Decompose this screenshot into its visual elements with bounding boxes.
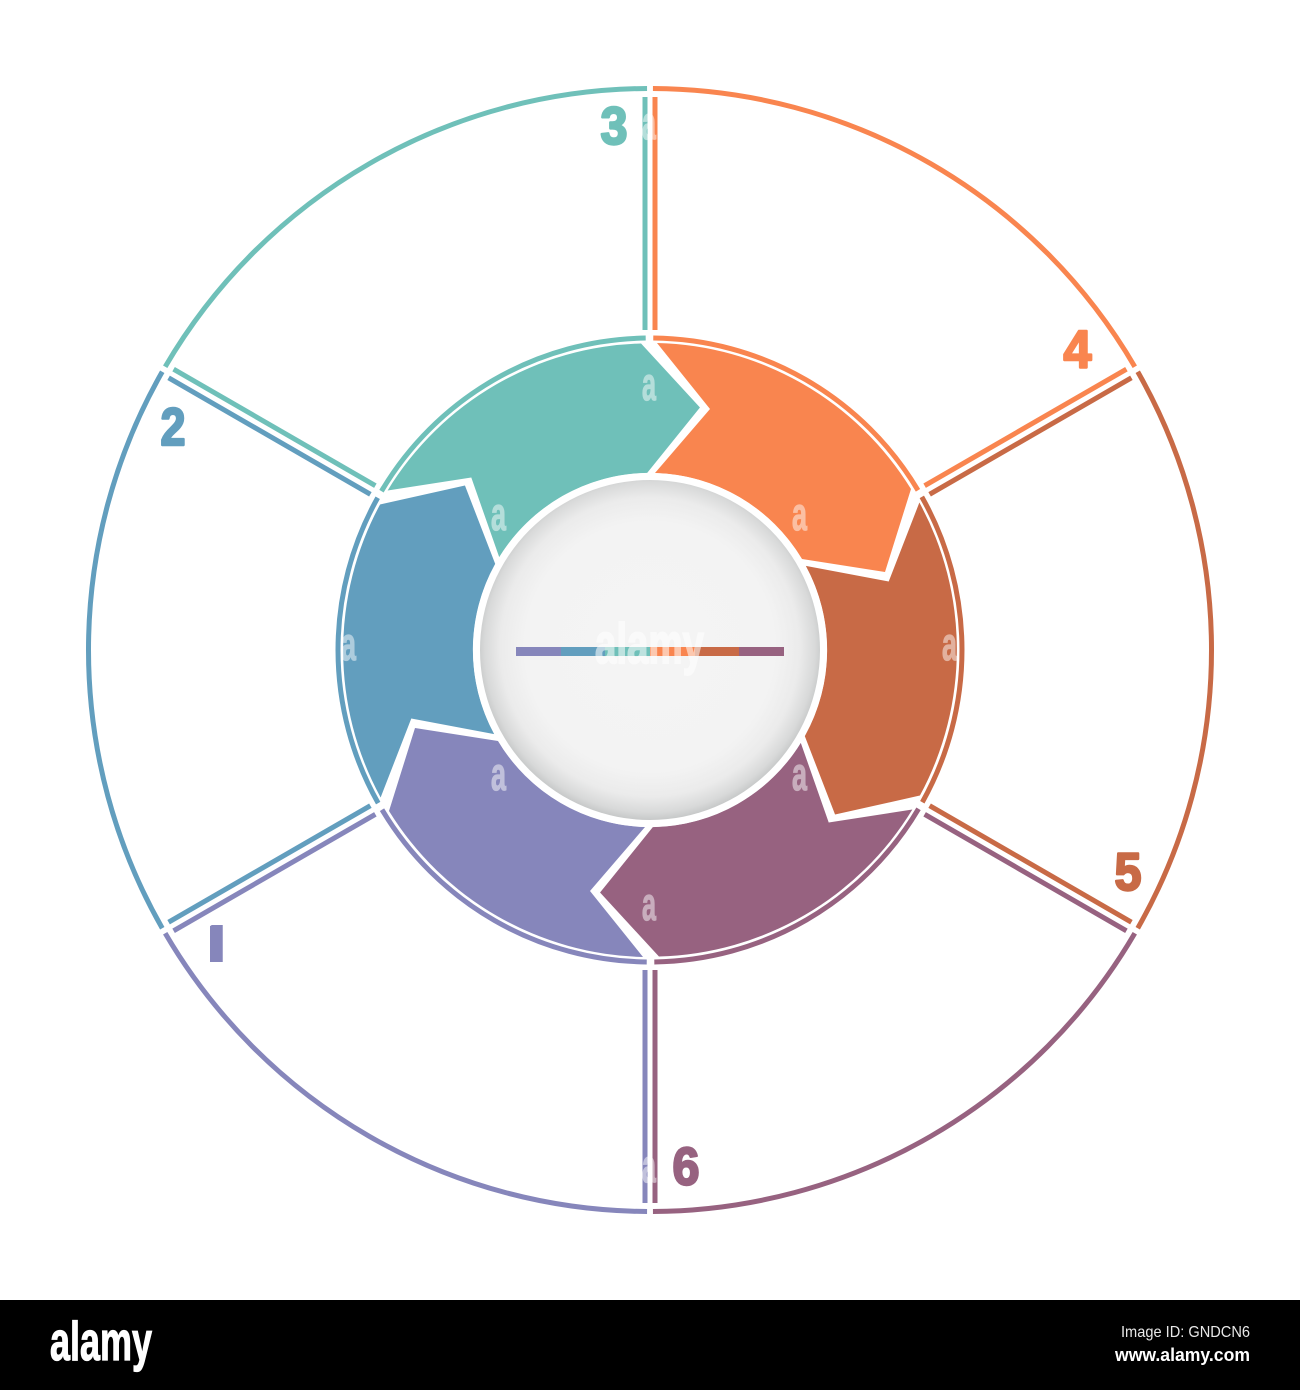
number 3: 3 [600, 97, 628, 156]
segment 4: orange [653, 89, 1135, 572]
number 6: 6 [672, 1138, 700, 1196]
watermark letters [341, 97, 957, 1192]
number 4: 4 [1064, 320, 1092, 380]
watermark letters: a [792, 748, 807, 800]
segment 3: teal [165, 0, 825, 608]
watermark letters: a [942, 618, 957, 670]
website: www.alamy.com [1114, 1345, 1250, 1365]
image id: Image ID: GNDCN6 [1121, 1324, 1250, 1341]
footer bar [0, 1300, 1300, 1390]
central disc [473, 473, 827, 827]
watermark letters: a [642, 97, 656, 149]
watermark letters: a [642, 1140, 656, 1192]
segment 5: brown [719, 372, 1300, 1031]
watermark letters: a [792, 488, 807, 540]
watermark letters: a [491, 488, 506, 540]
number 5: 5 [1114, 843, 1142, 902]
watermark letters: a [491, 748, 506, 800]
segment 2: blue [0, 269, 581, 928]
centre colour bar [516, 647, 784, 656]
centre watermark: alamy [595, 612, 704, 676]
watermark letters: a [642, 878, 656, 930]
number 2: 2 [160, 398, 186, 457]
footer logo: alamy [50, 1310, 152, 1372]
number 1: 1 [197, 913, 233, 985]
segment 1: lavender [165, 728, 647, 1211]
segment 6: mauve [475, 692, 1135, 1351]
watermark letters: a [341, 618, 356, 670]
watermark letters: a [642, 358, 656, 410]
